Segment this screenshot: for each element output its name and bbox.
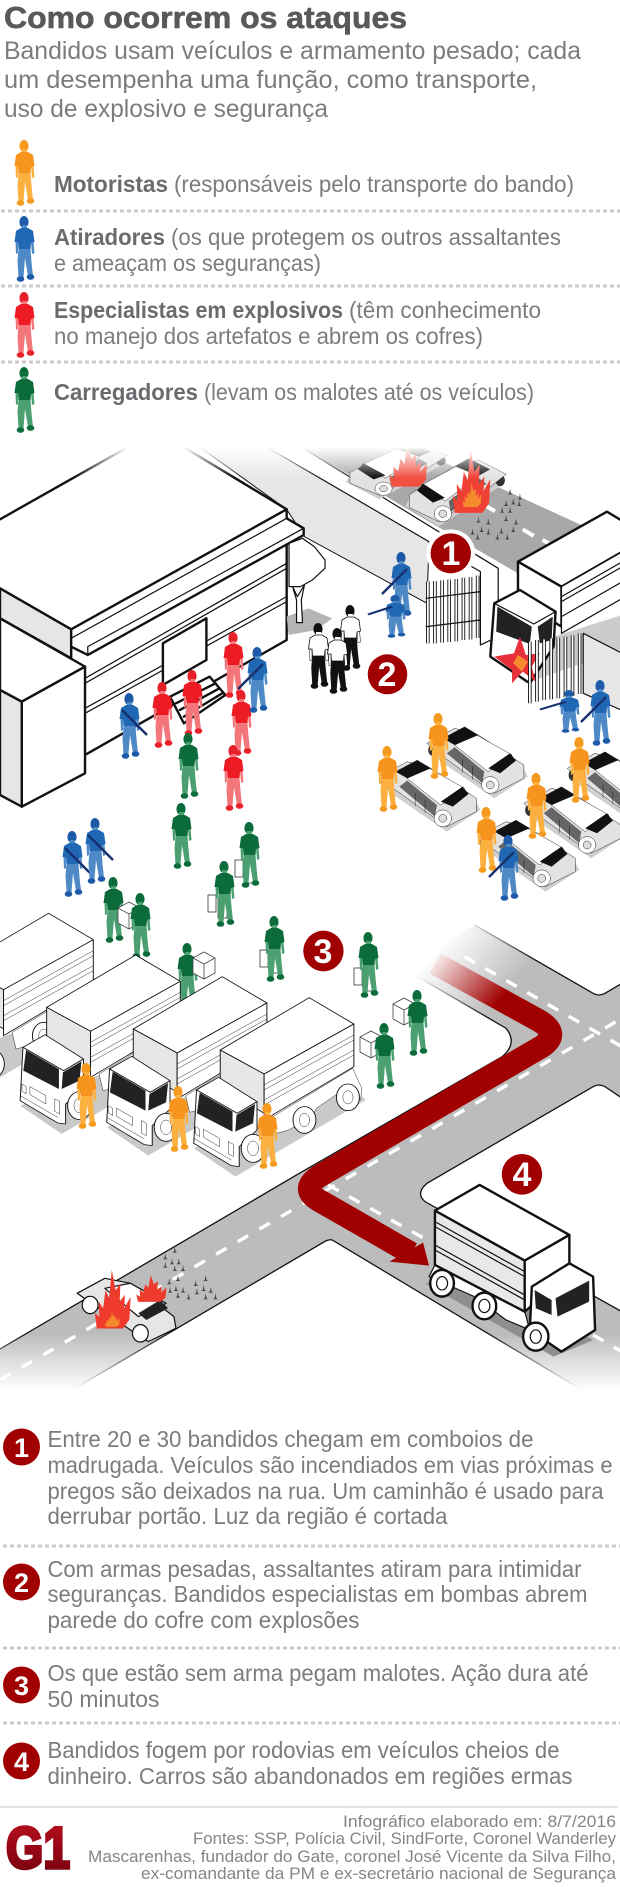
road with burning cars [301,440,581,573]
burning car 1 [346,442,447,499]
group: shooters [62,552,610,897]
sources credit: ex-comandante da PM e ex-secretário nacional de Segurança [141,1864,617,1883]
step 1: 1 [14,1433,29,1463]
trucks [0,913,366,1177]
sources credit: Mascarenhas, fundador do Gate, coronel José Vicente da Silva Filho, [88,1847,616,1866]
step 4: dinheiro. Carros são abandonados em regiões ermas [48,1763,572,1789]
number 3: 3 [314,933,332,971]
scene: escape [0,907,620,1456]
number 4: 4 [513,1156,532,1194]
legend item: especialistas: (têm conhecimento [349,297,541,323]
gate 1 [426,576,480,643]
scene: bank site [0,440,620,892]
subtitle: uso de explosivo e segurança [4,95,328,123]
legend item: carregadores: (levam os malotes até os veículos) [204,379,534,405]
red escape arrow [309,963,551,1266]
caltrops near burned car [163,1247,218,1299]
group: guards [308,605,360,694]
number 2: 2 [378,656,396,694]
legend item: especialistas: no manejo dos artefatos e abrem os cofres) [54,323,483,349]
step 3: Os que estão sem arma pegam malotes. Ação dura até [48,1660,588,1686]
group: drivers by the cars [378,713,590,873]
group: carriers [104,733,428,1089]
legend item: atiradores: (os que protegem os outros assaltantes [171,224,561,250]
legend item: especialistas [14,292,541,358]
burned car [77,1270,176,1342]
perimeter wall [269,447,498,645]
shooter by the cars [489,835,518,901]
subtitle: um desempenha uma função, como transporte, [4,66,537,94]
legend item: atiradores [14,216,561,282]
road fade [380,907,569,1022]
subtitle: Bandidos usam veículos e armamento pesado; cada [4,37,581,65]
legend item: motoristas [14,140,574,206]
wall right of gate [583,633,620,713]
logo: G1: G1 [6,1816,70,1881]
group: explosive specialists [152,632,252,811]
legend item: atiradores: e ameaçam os seguranças) [54,250,321,276]
legend item: especialistas: Especialistas em explosivos [54,297,343,323]
truck ramming the gate [490,512,620,683]
subtitle [4,37,581,123]
building [0,445,304,807]
step 1: Entre 20 e 30 bandidos chegam em comboios de [48,1426,534,1452]
step 2: seguranças. Bandidos especialistas em bombas abrem [48,1581,588,1607]
step 2: 2 [14,1568,29,1598]
legend [14,140,574,433]
marker 1 [426,529,475,577]
step 3: 50 minutos [48,1686,160,1712]
gate 2 [530,633,580,703]
number 1: 1 [442,535,460,573]
top fade [0,434,620,478]
burning car 2 [405,450,506,526]
step 1: derrubar portão. Luz da região é cortada [48,1503,448,1529]
getaway truck [425,1185,595,1357]
legend item: atiradores: Atiradores [54,224,165,250]
marker 2 [368,654,407,694]
explosion [494,637,540,683]
caltrops near gate [470,488,522,539]
step 2: parede do cofre com explosões [48,1607,360,1633]
step 1: pregos são deixados na rua. Um caminhão é usado para [48,1478,604,1504]
tree [287,538,332,635]
marker 4 [502,1154,542,1195]
marker 3 [303,931,344,971]
road dashes [486,506,549,543]
step 4 [3,1737,572,1789]
step 2: Com armas pesadas, assaltantes atiram para intimidar [48,1556,582,1582]
legend item: motoristas: Motoristas [54,171,168,197]
bottom fade [0,1333,620,1456]
step 4: Bandidos fogem por rodovias em veículos cheios de [48,1737,560,1763]
legend item: carregadores: Carregadores [54,379,198,405]
step 2 [3,1556,588,1633]
sources credit: Infográfico elaborado em: 8/7/2016 [343,1812,616,1831]
group: truck drivers [76,1063,278,1169]
step 4: 4 [14,1747,29,1777]
legend item: carregadores [14,367,534,433]
legend item: motoristas: (responsáveis pelo transporte do bando) [174,171,574,197]
cars [380,727,620,892]
step 3: 3 [14,1671,29,1701]
sources credit: Fontes: SSP, Polícia Civil, SindForte, Coronel Wanderley [193,1829,616,1848]
step 3 [3,1660,588,1712]
roads [0,925,620,1432]
title: Como ocorrem os ataques [4,0,407,35]
step 1 [3,1426,612,1529]
sidewalk behind the building [190,440,429,603]
sources credit [88,1812,617,1883]
